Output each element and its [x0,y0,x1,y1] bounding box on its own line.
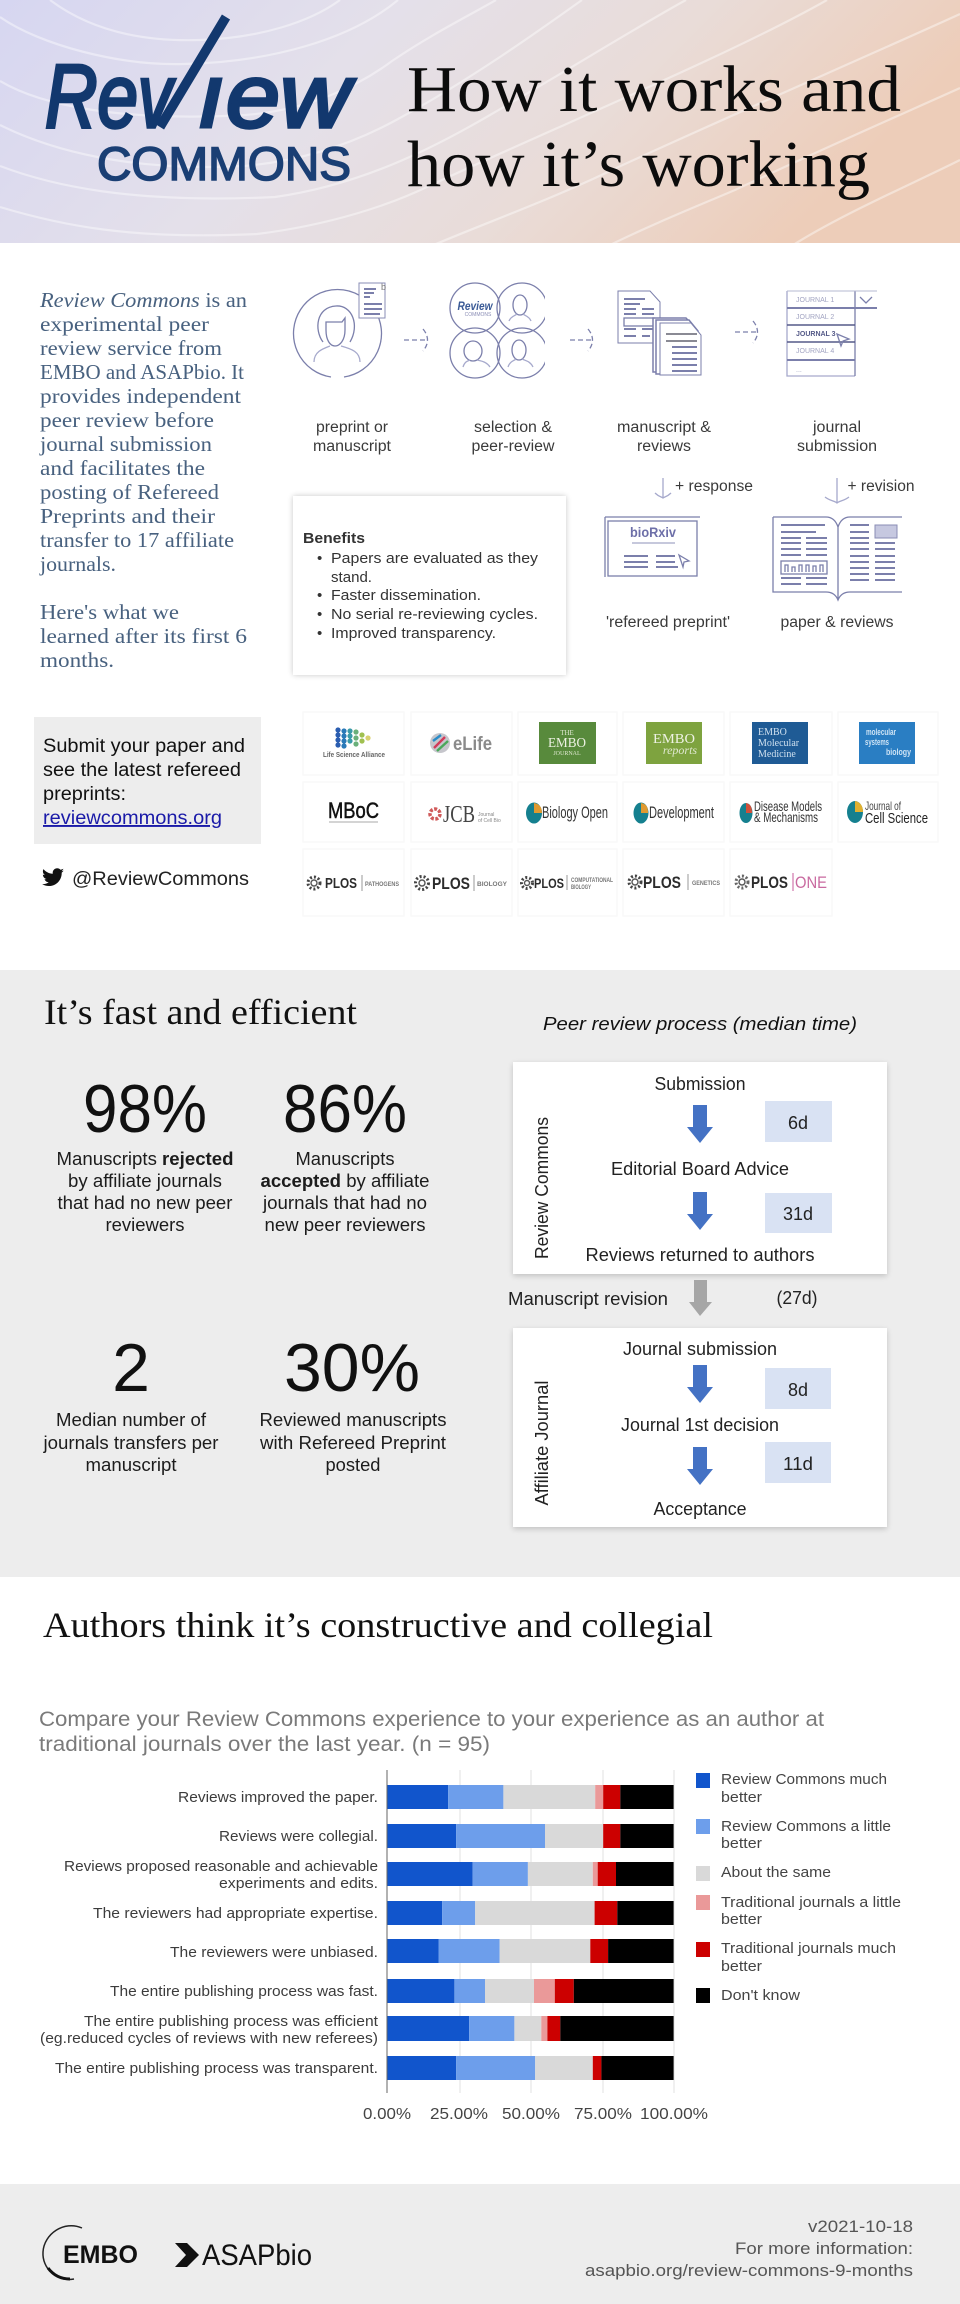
stat: 86%: new peer reviewers [264,1215,426,1235]
logo: The EMBO Journal: THE [560,729,574,737]
logo: molecular systems biology [859,722,915,764]
panel: fast and efficient [0,970,960,1577]
panel: benefits: No serial re-reviewing cycles. [331,606,538,623]
logo: Review Commons: v [138,47,176,147]
icon: preprint author [294,282,386,377]
logo: molecular systems biology: systems [865,737,889,747]
logo: PLOS Genetics [629,873,720,892]
step labels: selection & [474,419,553,436]
version and link [585,2217,913,2280]
step labels: peer-review [472,438,555,455]
logo: Disease Models and Mechanisms: & Mechanisms [754,809,818,825]
footer [0,2184,960,2304]
logo: MBoC: MBoC [328,798,379,823]
icon: journal list: ... [796,367,802,374]
logo: Life Science Alliance: Life Science Alliance [323,750,385,759]
intro text block [39,288,248,672]
x axis labels: 25.00% [430,2106,488,2123]
logo: Review Commons: i [200,47,225,147]
logo: PLOS Computational Biology: BIOLOGY [571,885,591,891]
flow: Review Commons [513,1062,887,1276]
intro text block: peer review before [40,408,214,432]
category labels: The entire publishing process was fast. [110,1983,378,2000]
version and link: asapbio.org/review-commons-9-months [585,2261,913,2280]
logo: Disease Models and Mechanisms [740,798,822,825]
intro text block: experimental peer [40,312,209,336]
x axis labels: 100.00% [640,2106,708,2123]
stat: 98%: 98% [83,1071,207,1147]
legend: Traditional journals much [721,1940,896,1957]
logo: Disease Models and Mechanisms: Disease Models [754,798,822,814]
logo: EMBO Molecular Medicine: Molecular [758,738,800,749]
flow: Review Commons: Review Commons [532,1117,552,1259]
step labels: reviews [637,438,691,455]
logo: PLOS Genetics: GENETICS [692,881,720,887]
logo: The EMBO Journal [539,722,596,764]
stat: 2: Median number of [56,1410,207,1430]
intro text block: posting of Refereed [40,480,220,504]
category labels: Reviews proposed reasonable and achievable [64,1858,378,1875]
step labels: preprint or [316,419,388,436]
category labels: experiments and edits. [219,1875,378,1892]
icon: twitter bird [42,868,64,886]
legend: Review Commons much [721,1771,887,1788]
logo: Development [634,802,714,824]
output labels: paper & reviews [780,614,894,631]
logo: EMBO reports: reports [663,743,697,757]
stat: 86%: 86% [283,1071,407,1147]
callout: submit your paper: see the latest refereed [43,760,241,781]
icon: journal list: JOURNAL 1 [796,297,834,304]
logo: Review Commons: Re [45,47,138,147]
stat: 30% [259,1330,446,1475]
panel: benefits: • [317,587,322,604]
stat: 2: journals transfers per [42,1433,219,1453]
logo: PLOS Computational Biology [522,875,613,891]
icon: bioRxiv refereed preprint [605,517,700,577]
bar: Reviews proposed reasonable [387,1862,674,1886]
logo: Life Science Alliance [323,727,385,759]
response arrow [655,478,753,498]
icon: manuscript and reviews [618,291,701,375]
chart title [39,1708,824,1756]
legend: About the same [721,1864,831,1881]
logo: PLOS Pathogens: PLOS [325,875,357,892]
output labels [606,614,894,631]
panel: benefits: Benefits [303,530,365,547]
logo: JCB: Journal [478,812,494,818]
logo: EMBO: EMBO [63,2241,138,2269]
stat: 30%: 30% [284,1330,420,1406]
heading: authors: Authors think it’s constructive and collegial [43,1605,713,1645]
logo: EMBO Molecular Medicine: EMBO [758,727,787,738]
logo: PLOS Biology: PLOS [432,874,470,893]
logo: eLife [430,733,492,755]
flow: Review Commons: Reviews returned to authors [586,1245,814,1265]
intro text block: EMBO and ASAPbio. It [40,360,244,384]
stat: 2: 2 [112,1330,150,1406]
logo: Journal of Cell Science [847,799,928,827]
flow: Review Commons: Submission [654,1074,746,1094]
chart title: Compare your Review Commons experience to your experience as an author at [39,1708,824,1731]
manuscript revision step: Manuscript revision [508,1289,668,1309]
version and link: v2021-10-18 [808,2217,913,2236]
title: how it’s working [407,128,870,201]
logo: Review Commons [45,17,355,190]
callout: submit your paper: reviewcommons.org [43,808,222,829]
stat: 86% [260,1071,430,1235]
revision arrow [825,478,914,503]
category labels: The entire publishing process was efficient [84,2013,379,2030]
icon: journal list: JOURNAL 3 [796,331,836,338]
logo: Journal of Cell Science: Cell Science [865,810,928,827]
stacked bar chart [40,1770,901,2123]
header banner [0,0,960,247]
intro text block: transfer to 17 affiliate [40,528,234,552]
legend: better [721,1911,762,1928]
legend: Traditional journals a little [721,1894,901,1911]
legend: Review Commons a little [721,1818,891,1835]
logo: The EMBO Journal: EMBO [548,736,586,751]
panel: benefits: Papers are evaluated as they [331,550,539,567]
logo: Review Commons: COMMONS [97,137,351,190]
intro text block: Review Commons is an [39,288,248,312]
step labels: manuscript [313,438,392,455]
icon: four reviewers [450,283,547,378]
arrow [570,329,592,351]
intro text block: Preprints and their [40,504,215,528]
flow: Review Commons: Editorial Board Advice [611,1159,789,1179]
legend: Don't know [721,1987,800,2004]
stat: 86%: journals that had no [262,1193,427,1213]
panel: benefits: • [317,625,322,642]
stat: 98% [56,1071,233,1235]
revision arrow: + revision [848,478,914,495]
logo: molecular systems biology: biology [886,747,911,757]
step labels: journal [812,419,861,436]
logo: The EMBO Journal: JOURNAL [553,751,581,757]
logo: JCB: JCB [443,802,475,828]
bar: process transparent [387,2056,674,2080]
logo: ASAPbio: ASAPbio [202,2239,312,2272]
logo: PLOS Pathogens [308,875,399,892]
bar: Reviews improved the paper [387,1785,674,1809]
logo: Biology Open [526,802,608,824]
bar: appropriate expertise [387,1901,674,1925]
legend [696,1771,901,2004]
panel: benefits: stand. [331,569,372,586]
panel: benefits: Improved transparency. [331,625,496,642]
flow: Affiliate Journal: 11d [783,1454,813,1474]
panel: benefits [293,496,566,675]
logo: PLOS ONE: ONE [795,873,827,892]
icon: four reviewers: Review [458,299,493,313]
logo: Journal of Cell Science: Journal of [865,799,901,813]
manuscript revision step: (27d) [776,1288,818,1308]
x axis labels [363,2106,708,2123]
x axis labels: 50.00% [502,2106,560,2123]
manuscript revision step [508,1280,818,1316]
logo: EMBO [43,2226,138,2279]
category labels: Reviews were collegial. [219,1828,378,1845]
category labels [40,1789,379,2077]
callout: submit your paper: preprints: [43,784,126,805]
intro text block: provides independent [40,384,241,408]
intro text block: Here's what we [40,600,179,624]
response arrow: + response [675,478,753,495]
step labels: manuscript & [617,419,712,436]
twitter handle: @ReviewCommons [72,869,249,890]
flow: Affiliate Journal: 8d [788,1380,808,1400]
legend: better [721,1835,762,1852]
logo: PLOS Biology [416,874,507,893]
callout: submit your paper [34,717,261,844]
stat: 98%: reviewers [106,1215,184,1235]
intro text block: months. [40,648,114,672]
icon: journal list: JOURNAL 2 [796,314,834,321]
category labels: Reviews improved the paper. [178,1789,378,1806]
intro text block: journal submission [39,432,213,456]
heading: It’s fast and efficient [44,992,357,1032]
logo: PLOS Biology: BIOLOGY [477,882,507,888]
icon: preprint author: b [381,282,386,292]
logo: PLOS Genetics: PLOS [643,873,681,892]
logo: Biology Open: Biology Open [542,803,608,822]
arrow [735,321,758,343]
logo: EMBO Molecular Medicine [752,722,808,764]
callout: submit your paper: Submit your paper and [43,736,245,757]
stat: 30%: posted [326,1455,380,1475]
category labels: (eg.reduced cycles of reviews with new referees) [40,2030,378,2047]
stat: 86%: accepted by affiliate [260,1171,430,1191]
x axis labels: 75.00% [574,2106,632,2123]
category labels: The reviewers had appropriate expertise. [93,1905,378,1922]
version and link: For more information: [735,2239,913,2258]
bar: process efficient [387,2016,674,2041]
icon: four reviewers: COMMONS [465,312,492,318]
category labels: The entire publishing process was transparent. [55,2060,378,2077]
panel: benefits: • [317,606,322,623]
intro text block: review service from [40,336,222,360]
logo: eLife: eLife [453,734,492,755]
flow: Review Commons: 6d [788,1113,808,1133]
process diagram [294,282,915,631]
journal logos grid [303,712,938,916]
icon: journal list: JOURNAL 4 [796,348,834,355]
stat: 98%: that had no new peer [58,1193,232,1213]
bar: Reviews were collegial [387,1824,674,1848]
logo: JCB [430,802,501,828]
panel: benefits: • [317,550,322,567]
step labels [313,419,877,455]
icon: open journal paper [773,517,902,600]
legend: better [721,1789,762,1806]
stat: 86%: Manuscripts [296,1149,394,1169]
stat: 98%: by affiliate journals [68,1171,222,1191]
stat: 30%: with Refereed Preprint [259,1433,446,1453]
title [407,53,901,201]
logo: EMBO Molecular Medicine: Medicine [758,749,796,760]
flow: Review Commons: 31d [783,1204,813,1224]
legend: better [721,1958,762,1975]
stat: 98%: Manuscripts rejected [56,1149,233,1169]
chart title: traditional journals over the last year. (n = 95) [39,1733,490,1756]
logo: Review Commons: ew [226,47,355,147]
logo: EMBO reports: EMBO [653,732,695,747]
intro text block: learned after its first 6 [40,624,247,648]
flow: Affiliate Journal: Journal 1st decision [621,1415,779,1435]
flow: Affiliate Journal [513,1328,887,1529]
bar: process fast [387,1979,674,2003]
arrow [404,329,428,351]
logo: Development: Development [649,803,714,822]
icon: bioRxiv refereed preprint: bioRxiv [630,524,676,540]
x axis labels: 0.00% [363,2106,411,2123]
category labels: The reviewers were unbiased. [170,1944,378,1961]
stat: 2: manuscript [86,1455,176,1475]
flow: Affiliate Journal: Acceptance [654,1499,746,1519]
stat: 2 [42,1330,219,1475]
stat: 30%: Reviewed manuscripts [260,1410,446,1430]
intro text block: and facilitates the [40,456,205,480]
panel: benefits: Faster dissemination. [331,587,481,604]
logo: JCB: of Cell Bio [478,818,501,824]
icon: journal list [787,291,877,376]
logo: EMBO reports [646,722,702,764]
logo: PLOS Computational Biology: PLOS [534,875,564,891]
intro text block: journals. [39,552,116,576]
step labels: submission [797,438,877,455]
logo: PLOS Computational Biology: COMPUTATIONAL [571,878,613,884]
output labels: 'refereed preprint' [606,614,730,631]
flow: Affiliate Journal: Journal submission [623,1339,777,1359]
title: How it works and [407,53,901,126]
bar: unbiased [387,1939,674,1963]
logo: PLOS ONE: PLOS [751,873,788,892]
heading: peer review process: Peer review process (median time) [543,1014,857,1034]
logo: molecular systems biology: molecular [866,727,896,737]
flow: Affiliate Journal: Affiliate Journal [532,1380,552,1506]
logo: PLOS Pathogens: PATHOGENS [365,882,399,888]
logo: PLOS ONE [736,873,827,892]
